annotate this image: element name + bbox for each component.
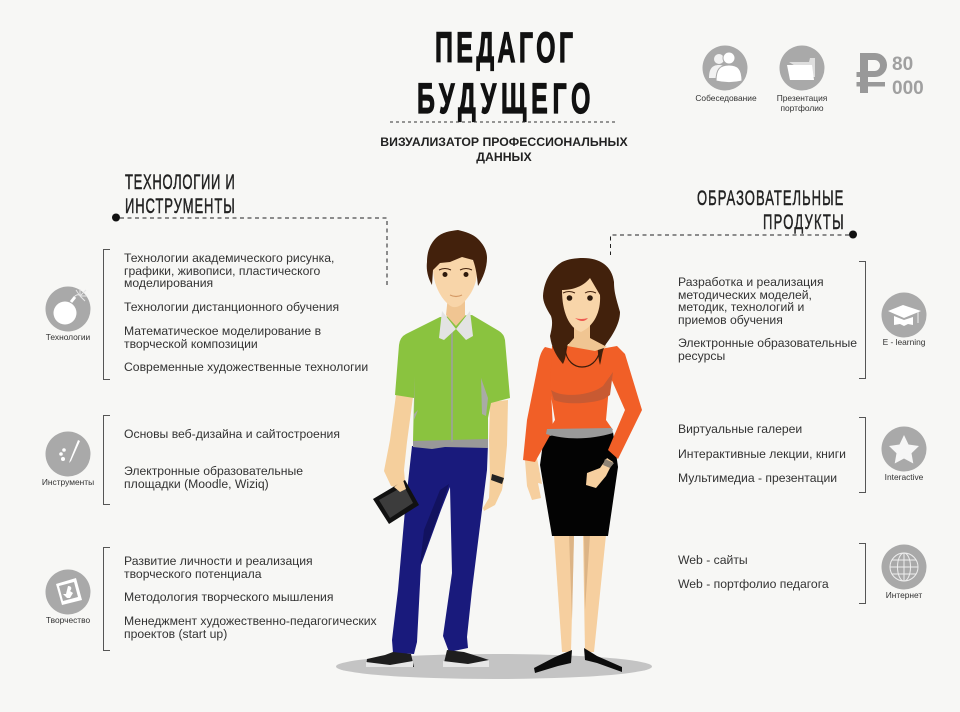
woman legs [554,535,574,652]
heading: technologies and tools: ИНСТРУМЕНТЫ [125,194,235,218]
text: virtual galleries: Виртуальные галереи [678,422,802,436]
woman shoes [534,650,572,673]
subtitle: ВИЗУАЛИЗАТОР ПРОФЕССИОНАЛЬНЫХ [380,135,628,149]
man arms [384,395,413,489]
man watch [491,474,504,484]
heading: educational products: ОБРАЗОВАТЕЛЬНЫЕ [697,186,843,210]
connector: left heading to man [112,214,387,287]
woman face [562,278,600,332]
label: portfolio: Презентация [777,93,827,103]
text: methodical models: приемов обучения [678,312,783,326]
man hair [427,230,487,286]
text: methodical models [678,275,824,326]
text: drawing technologies: моделирования [124,276,213,290]
man collar [439,311,473,340]
heading: educational products [697,186,844,234]
text: educational platforms [124,464,303,490]
text: distance learning: Технологии дистанционного обучения [124,300,339,314]
text: web design: Основы веб-дизайна и сайтостроения [124,427,340,441]
label: portfolio: портфолио [780,103,824,113]
text: educational platforms: площадки (Moodle, Wiziq) [124,476,269,490]
icon: interview [702,46,748,90]
text: methodical models: Разработка и реализация [678,275,824,289]
icon: star [882,426,926,472]
woman skirt [540,432,618,536]
icon: brush [46,432,90,476]
heading: technologies and tools [125,170,235,218]
man eyes and mouth [439,268,472,296]
woman eyes and mouth [563,292,596,321]
figure: woman [523,258,642,673]
text: personal development: творческого потенциала [124,566,262,580]
text: creative thinking: Методология творческого мышления [124,590,333,604]
text: modern art technologies: Современные художественные технологии [124,360,368,374]
text: electronic resources [678,336,857,362]
text: project management: Менеджмент художественно-педагогических [124,614,377,628]
icon: portfolio folder [780,46,824,90]
woman necklace [565,348,600,367]
man neck [446,296,465,326]
text: electronic resources: Электронные образовательные [678,336,857,350]
text: personal development: Развитие личности и реализация [124,554,313,568]
text: web sites: Web - сайты [678,553,748,567]
text: methodical models: методических моделей, [678,288,812,302]
heading: technologies and tools: ТЕХНОЛОГИИ И [125,170,235,194]
icon: bomb [46,286,90,332]
label: interview: Собеседование [695,93,757,103]
icon: globe [882,544,926,590]
man face [433,254,477,307]
text: project management [124,614,377,640]
brackets [104,250,866,650]
man shoes [366,652,414,667]
salary figure [892,54,924,99]
label: interactive: Interactive [885,472,923,482]
label: internet: Интернет [886,590,922,600]
man fingers [394,480,406,492]
subtitle: ДАННЫХ [476,150,532,164]
woman right hand [586,458,613,488]
icon: graduation cap [882,292,926,338]
figure: man [366,230,510,667]
text: drawing technologies: графики, живописи, пластического [124,264,320,278]
text: mathematical modelling: Математическое моделирование в [124,324,321,338]
woman left hand [525,458,542,500]
label: tools: Инструменты [42,477,94,487]
text: mathematical modelling [124,324,321,350]
text: mathematical modelling: творческой композиции [124,336,258,350]
text: interactive lectures: Интерактивные лекции, книги [678,447,846,461]
title [417,24,590,123]
text: project management: проектов (start up) [124,626,227,640]
man shirt [395,315,510,441]
man tablet [373,480,419,524]
label: e-learning: E - learning [883,337,925,347]
label: creativity: Творчество [46,615,90,625]
icon: photo [46,570,90,614]
salary figure: 80 [892,54,913,75]
text: drawing technologies: Технологии академического рисунка, [124,251,334,265]
text: multimedia: Мультимедиа - презентации [678,471,837,485]
text: web portfolio: Web - портфолио педагога [678,577,829,591]
subtitle [380,135,628,164]
text: drawing technologies [124,251,334,290]
text: methodical models: методик, технологий и [678,300,804,314]
text: educational platforms: Электронные образовательные [124,464,303,478]
woman neck [567,322,607,351]
salary figure: 000 [892,78,924,99]
ground shadow [336,654,652,679]
label: portfolio [777,93,827,113]
text: personal development [124,554,313,580]
title: БУДУЩЕГО [417,75,590,123]
text: electronic resources: ресурсы [678,348,725,362]
heading: educational products: ПРОДУКТЫ [763,210,844,234]
man trousers [392,444,488,654]
label: technologies: Технологии [46,332,90,342]
woman back hair [543,258,620,365]
title: ПЕДАГОГ [435,24,573,72]
woman sleeves and top [523,347,565,462]
icon: ruble sign [856,53,887,93]
connector: right heading to woman [610,230,857,255]
